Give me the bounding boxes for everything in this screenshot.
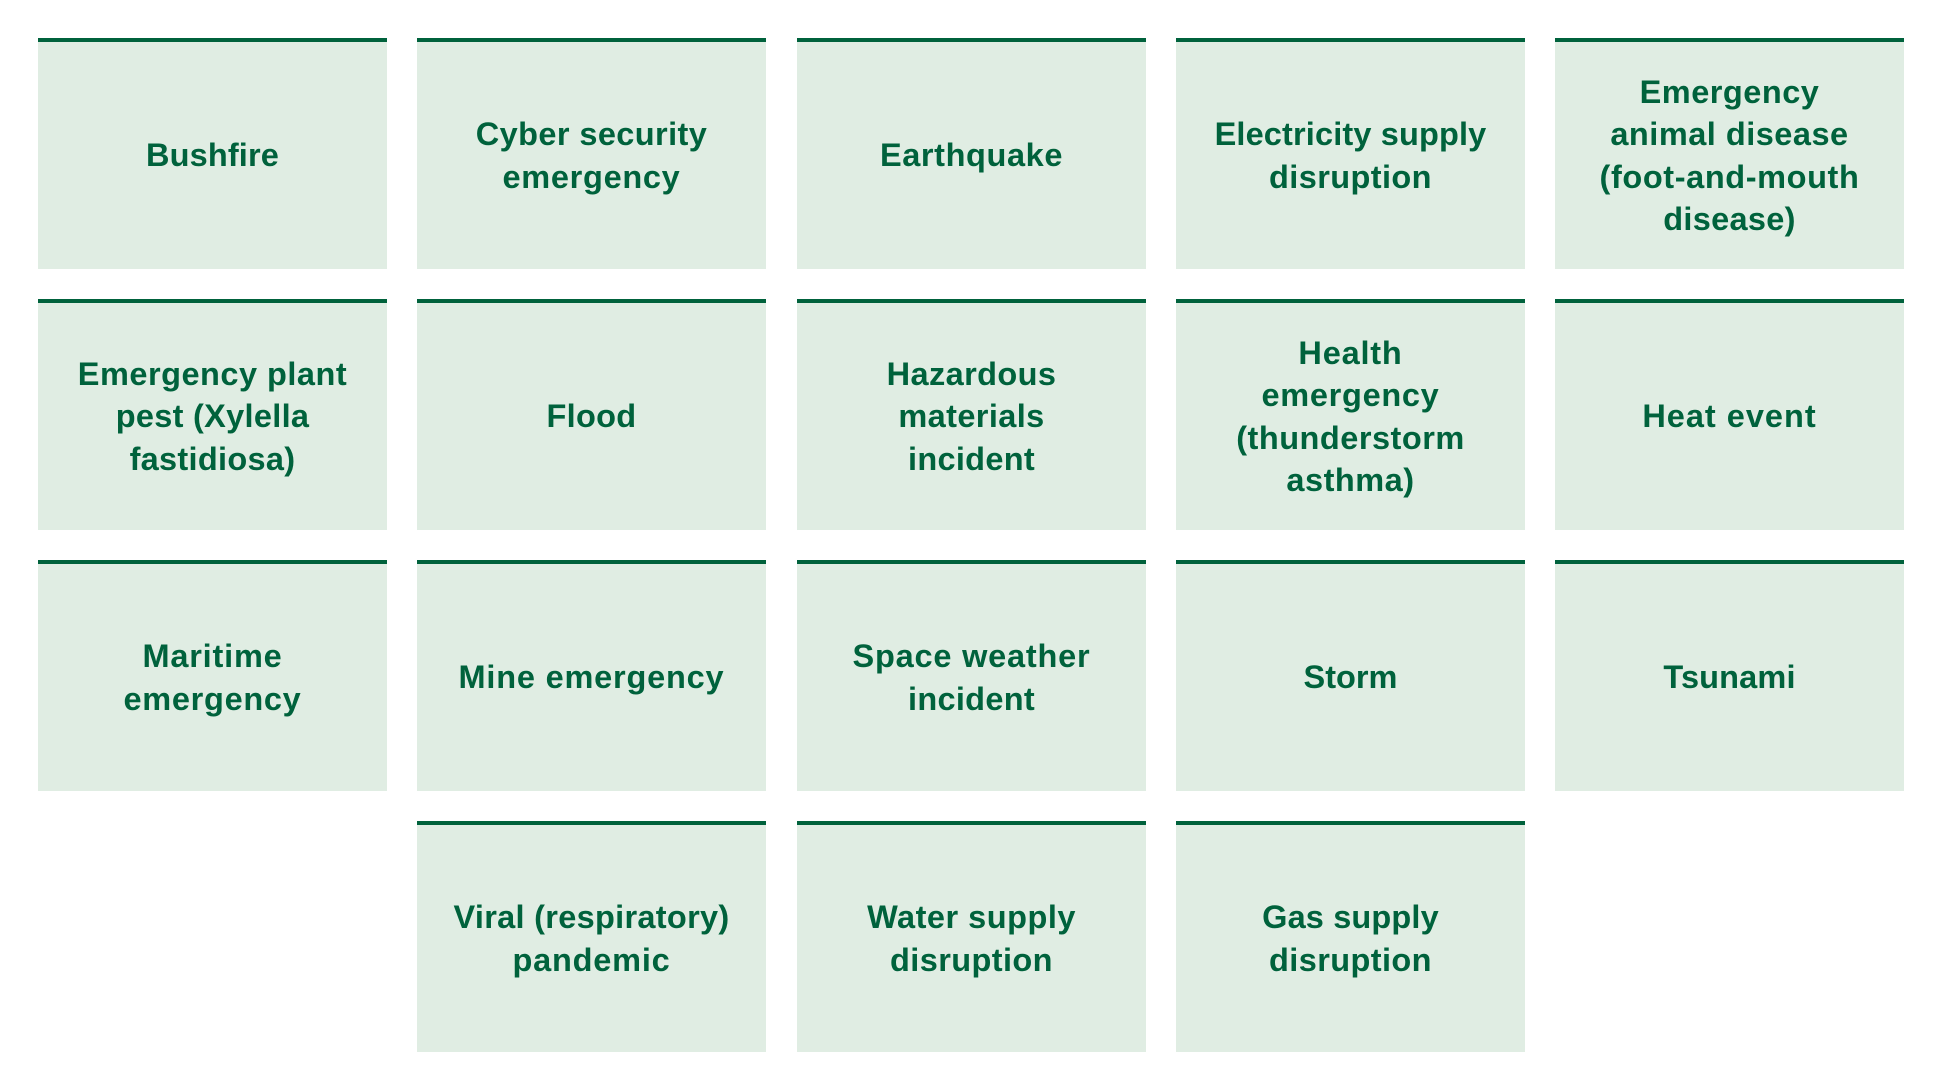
tile: Hazardous materials incident xyxy=(797,299,1146,530)
tile: Space weather incident: Space weather xyxy=(852,638,1090,674)
tile: Flood xyxy=(417,299,766,530)
tile: Water supply disruption: disruption xyxy=(890,942,1053,978)
tile: Water supply disruption xyxy=(797,821,1146,1052)
tile: Electricity supply disruption: disruption xyxy=(1269,158,1432,194)
tile: Hazardous materials incident: materials xyxy=(898,398,1045,434)
tile: Hazardous materials incident: incident xyxy=(908,441,1035,477)
tile: Earthquake: Earthquake xyxy=(880,137,1063,173)
tile: Emergency animal disease: disease) xyxy=(1663,201,1796,237)
tile: Viral (respiratory) pandemic: Viral (respiratory) xyxy=(453,899,730,935)
tile: Cyber security emergency xyxy=(417,38,766,269)
tile: Emergency plant pest: fastidiosa) xyxy=(130,441,295,477)
tile: Mine emergency xyxy=(417,560,766,791)
tile: Heat event xyxy=(1555,299,1904,530)
tile: Cyber security emergency: emergency xyxy=(503,158,680,194)
tile: Flood: Flood xyxy=(547,398,636,434)
tile: Bushfire xyxy=(38,38,387,269)
tile: Space weather incident xyxy=(797,560,1146,791)
tile: Tsunami xyxy=(1555,560,1904,791)
tile: Tsunami: Tsunami xyxy=(1663,659,1796,695)
tile: Viral (respiratory) pandemic xyxy=(417,821,766,1052)
tile: Health emergency: asthma) xyxy=(1286,462,1415,498)
tile: Emergency animal disease: Emergency xyxy=(1640,74,1819,110)
tile: Emergency animal disease xyxy=(1555,38,1904,269)
tile: Emergency plant pest: Emergency plant xyxy=(78,356,347,392)
tile: Emergency animal disease: animal disease xyxy=(1610,116,1849,152)
tile: Maritime emergency: emergency xyxy=(124,680,301,716)
tile: Bushfire: Bushfire xyxy=(146,137,279,173)
tile: Electricity supply disruption: Electricity supply xyxy=(1215,116,1486,152)
tile: Gas supply disruption xyxy=(1176,821,1525,1052)
tile: Health emergency: Health xyxy=(1298,334,1403,370)
tile: Storm xyxy=(1176,560,1525,791)
tile: Mine emergency: Mine emergency xyxy=(459,659,724,695)
tile: Heat event: Heat event xyxy=(1642,398,1817,434)
tile: Emergency animal disease: (foot-and-mouth xyxy=(1600,158,1859,194)
tile: Maritime emergency: Maritime xyxy=(142,638,283,674)
tile: Viral (respiratory) pandemic: pandemic xyxy=(512,942,671,978)
tile: Gas supply disruption: Gas supply xyxy=(1262,899,1439,935)
tile: Water supply disruption: Water supply xyxy=(867,899,1076,935)
tile: Gas supply disruption: disruption xyxy=(1269,942,1432,978)
tile: Space weather incident: incident xyxy=(908,680,1035,716)
tile: Earthquake xyxy=(797,38,1146,269)
tile: Health emergency xyxy=(1176,299,1525,530)
tile: Electricity supply disruption xyxy=(1176,38,1525,269)
tile: Cyber security emergency: Cyber security xyxy=(476,116,707,152)
tile: Storm: Storm xyxy=(1304,659,1397,695)
tile: Maritime emergency xyxy=(38,560,387,791)
tile: Emergency plant pest xyxy=(38,299,387,530)
tile: Health emergency: emergency xyxy=(1262,377,1439,413)
tile: Health emergency: (thunderstorm xyxy=(1236,420,1465,456)
tile: Hazardous materials incident: Hazardous xyxy=(887,356,1056,392)
tile: Emergency plant pest: pest (Xylella xyxy=(116,398,309,434)
